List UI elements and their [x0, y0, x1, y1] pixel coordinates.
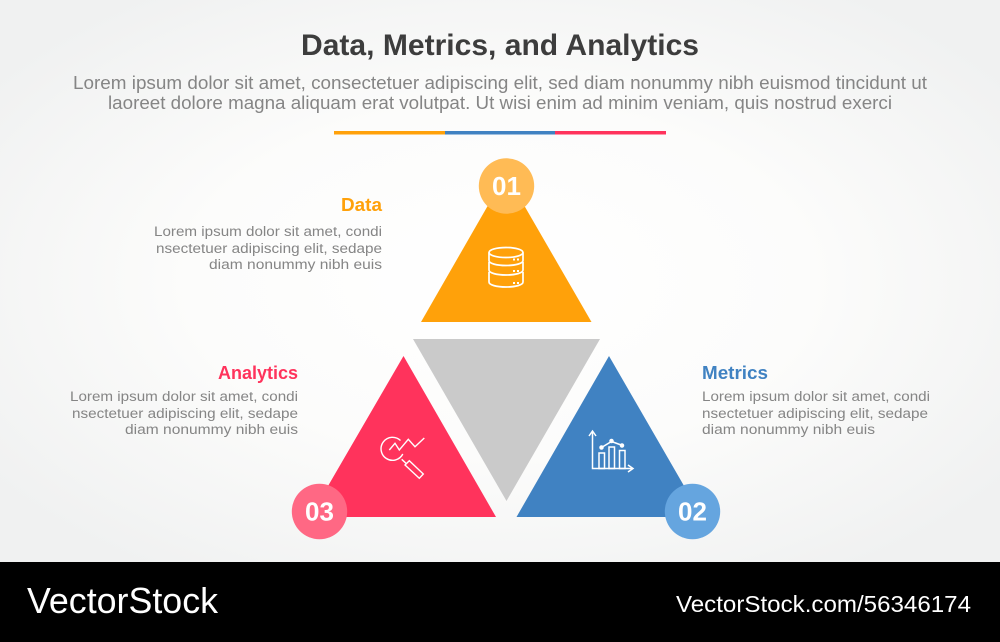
text block: metrics: Lorem ipsum dolor sit amet, condi — [702, 389, 930, 404]
text block: analytics — [70, 363, 298, 437]
panel: data triangle — [421, 158, 592, 322]
footer band — [0, 562, 1000, 642]
text block: data: nsectetuer adipiscing elit, sedape — [156, 241, 382, 256]
text block: metrics: diam nonummy nibh euis — [702, 422, 875, 437]
badge 02 — [665, 484, 720, 539]
text block: metrics — [702, 363, 930, 437]
badge 01 — [479, 158, 534, 214]
center grey triangle — [413, 339, 600, 501]
subtitle: Lorem ipsum dolor sit amet, consectetuer adipiscing elit, sed diam nonummy nibh euismod tincidunt ut — [73, 73, 927, 93]
text block: data — [154, 195, 383, 272]
badge 02: 02 — [678, 496, 707, 526]
icon: bar chart with axes — [589, 431, 633, 472]
text block: analytics: diam nonummy nibh euis — [125, 422, 298, 437]
text block: analytics: Analytics — [218, 363, 298, 383]
footer logo: VectorStock — [27, 580, 219, 621]
subtitle — [73, 73, 927, 113]
icon: database — [489, 248, 523, 287]
panel: metrics triangle — [516, 356, 720, 539]
text block: analytics: nsectetuer adipiscing elit, sedape — [72, 406, 298, 421]
text block: metrics: nsectetuer adipiscing elit, sedape — [702, 406, 928, 421]
footer url: VectorStock.com/56346174 — [676, 591, 971, 617]
text block: data: Lorem ipsum dolor sit amet, condi — [154, 224, 382, 239]
title: Data, Metrics, and Analytics — [301, 29, 699, 62]
tri-colour divider — [334, 131, 666, 134]
text block: data: Data — [341, 195, 383, 215]
panel: analytics triangle — [292, 356, 496, 539]
text block: analytics: Lorem ipsum dolor sit amet, condi — [70, 389, 298, 404]
text block: data: diam nonummy nibh euis — [209, 257, 382, 272]
badge 03 — [292, 484, 347, 539]
subtitle: laoreet dolore magna aliquam erat volutpat. Ut wisi enim ad minim veniam, quis nostrud exerci — [108, 93, 892, 113]
icon: magnifier with trend line — [381, 437, 424, 478]
badge 01: 01 — [492, 171, 521, 201]
badge 03: 03 — [305, 496, 334, 526]
text block: metrics: Metrics — [702, 363, 768, 383]
